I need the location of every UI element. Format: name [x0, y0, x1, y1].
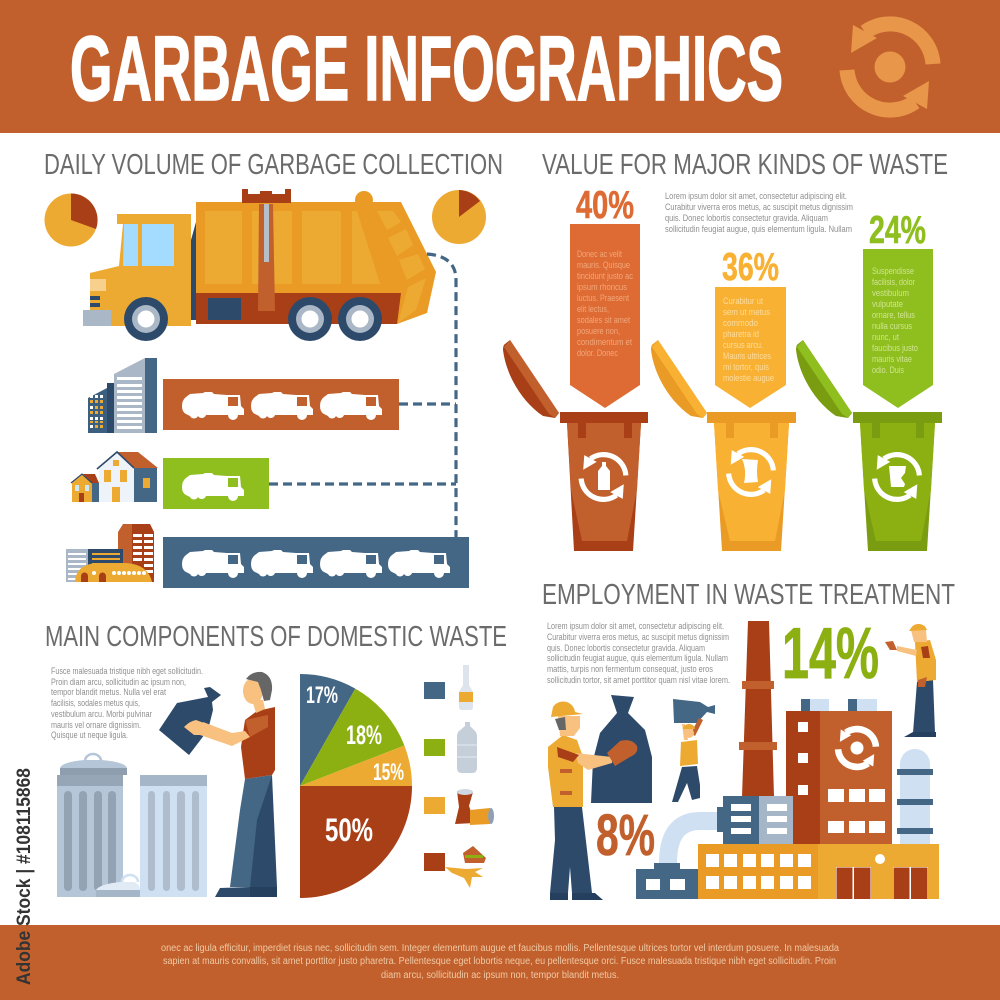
percent: 24%: 24%	[869, 209, 926, 252]
bar: three trucks	[163, 379, 399, 430]
panel: red bin 40%: luctus. Praesent	[577, 293, 629, 303]
text block: value intro: sollicitudin feugiat augue, quis elementum ligula. Nullam	[665, 224, 852, 234]
panel: orange bin 36%: sem ut metus	[723, 307, 770, 317]
text block: components description: vestibulum arcu. Morbi pulvinar	[51, 709, 152, 719]
panel: orange bin 36%: pharetra id	[723, 329, 759, 339]
panel: green bin 24%: vulputate	[872, 299, 903, 309]
panel: orange bin 36%	[651, 246, 796, 551]
panel: red bin 40%: mauris. Quisque	[577, 260, 630, 270]
panel: orange bin 36%: commodo	[723, 318, 758, 328]
panel: red bin 40%	[503, 184, 648, 551]
icon: header recycling symbol	[847, 24, 933, 110]
footer text: diam arcu, sollicitudin ac ipsum non, tempor blandit metus.	[381, 970, 619, 981]
panel: green bin 24%: odio. Duis	[872, 365, 904, 375]
panel: red bin 40%: Donec ac velit	[577, 249, 622, 259]
footer text	[161, 943, 839, 981]
text block: components description: mauris vel ornare dignissim.	[51, 720, 141, 730]
panel: red bin 40%: tincidunt justo ac	[577, 271, 633, 281]
icon: worker carrying bag	[672, 699, 715, 802]
text block: employment description: Lorem ipsum dolor sit amet, consectetur adipiscing elit.	[547, 621, 724, 631]
panel: garbage truck	[44, 189, 486, 341]
panel: green bin 24%: nulla cursus	[872, 321, 912, 331]
text block: value intro: quis. Donec lobortis consectetur gravida. Aliquam	[665, 213, 828, 223]
illustration: factory	[636, 621, 939, 899]
text block: value intro: Lorem ipsum dolor sit amet, consectetur adipiscing elit.	[665, 191, 847, 201]
text block: employment description: sollicitudin feugiat augue, quis elementum ligula. Nullam	[547, 653, 728, 663]
panel: orange bin 36%: Mauris ultrices	[723, 351, 771, 361]
text block: components description	[51, 666, 203, 740]
footer band	[0, 925, 1000, 1000]
panel: orange bin 36%: molestie augue	[723, 373, 774, 383]
text block: components description: Proin diam arcu, sollicitudin ac ipsum non,	[51, 677, 186, 687]
label: 50%: 50%	[325, 812, 373, 848]
text block: components description: Fusce malesuada tristique nibh eget sollicitudin.	[51, 666, 203, 676]
label: 15%: 15%	[373, 759, 404, 786]
panel: green bin 24%: vestibulum	[872, 288, 909, 298]
panel: red bin 40%: posuere non,	[577, 326, 620, 336]
footer text: onec ac ligula efficitur, imperdiet risus nec, sollicitudin sem. Integer elementum augue et faucibus mollis. Pellentesque ultrices tortor vel interdum posuere. In malesuada	[161, 943, 839, 954]
text block: value intro: Curabitur viverra eros metus, ac suscipit metus dignissim	[665, 202, 853, 212]
panel: orange bin 36%: mi tortor, quis	[723, 362, 769, 372]
panel: green bin 24%: facilisis, dolor	[872, 277, 915, 287]
panel: red bin 40%: elit lectus,	[577, 304, 609, 314]
legend: glass bottle	[424, 665, 473, 710]
text block: components description: Quisque ut neque ligula.	[51, 730, 128, 740]
text block: employment description: sollicitudin tortor, sit amet porttitor quam nisl vitae lorem.	[547, 675, 730, 685]
text block: employment description: Curabitur viverra eros metus, ac suscipit metus dignissim	[547, 632, 729, 642]
chart: waste pie	[300, 674, 412, 898]
text block: employment description	[547, 621, 730, 685]
panel: green bin 24%: faucibus justo	[872, 343, 918, 353]
stock id label: Adobe Stock | #108115868	[14, 768, 35, 985]
panel: red bin 40%: ipsum rhoncus	[577, 282, 627, 292]
heading: main components: MAIN COMPONENTS OF DOMESTIC WASTE	[45, 621, 507, 653]
percent: 40%: 40%	[576, 184, 634, 227]
text block: value intro	[665, 191, 853, 234]
panel: red bin 40%: condimentum et	[577, 337, 632, 347]
panel: green bin 24%	[796, 209, 942, 551]
bar: one truck	[163, 458, 269, 509]
legend: plastic bottle	[424, 722, 477, 773]
footer text: sapien at mauris convallis, sit amet porttitor justo pharetra. Pellentesque eget lobortis neque, eu pellentesque orci. Fusce malesuada tristique nibh eget sollicitudin. Proin	[163, 956, 836, 967]
panel: green bin 24%: mauris vitae	[872, 354, 912, 364]
percent: 14%: 14%	[782, 614, 879, 694]
label: 17%: 17%	[306, 682, 338, 709]
percent: 8%: 8%	[596, 803, 655, 868]
legend: cans	[424, 789, 494, 825]
heading: daily volume: DAILY VOLUME OF GARBAGE COLLECTION	[44, 149, 503, 181]
icon: man with bag	[159, 672, 277, 897]
percent: 36%: 36%	[722, 246, 779, 289]
icon: trash cans	[57, 754, 207, 897]
icon: city buildings	[66, 524, 154, 582]
dashed connector lines	[269, 254, 456, 537]
text block: components description: facilisis, sodales metus quis,	[51, 698, 140, 708]
label: 18%: 18%	[346, 720, 382, 750]
panel: orange bin 36%: cursus arcu.	[723, 340, 763, 350]
bar: four trucks	[163, 537, 469, 588]
panel: red bin 40%: sodales sit amet	[577, 315, 630, 325]
icon: houses	[71, 452, 158, 502]
header band	[0, 0, 1000, 133]
panel: green bin 24%: nunc, ut	[872, 332, 899, 342]
icon: worker with big bag	[548, 695, 652, 900]
text block: employment description: mattis, turpis non fermentum consequat, justo eros	[547, 664, 713, 674]
panel: red bin 40%: dolor. Donec	[577, 348, 618, 358]
panel: orange bin 36%: Curabitur ut	[723, 296, 763, 306]
text block: employment description: quis. Donec lobortis consectetur gravida. Aliquam	[547, 643, 705, 653]
legend: food scraps	[424, 846, 486, 888]
panel: green bin 24%: Suspendisse	[872, 266, 914, 276]
icon: office towers	[88, 358, 157, 433]
chart: small pie left	[44, 193, 98, 246]
panel: green bin 24%: ornare, tellus	[872, 310, 915, 320]
chart: small pie right	[432, 190, 486, 244]
text block: components description: tempor blandit metus. Nulla vel erat	[51, 687, 166, 697]
icon: worker pointing	[885, 624, 936, 737]
